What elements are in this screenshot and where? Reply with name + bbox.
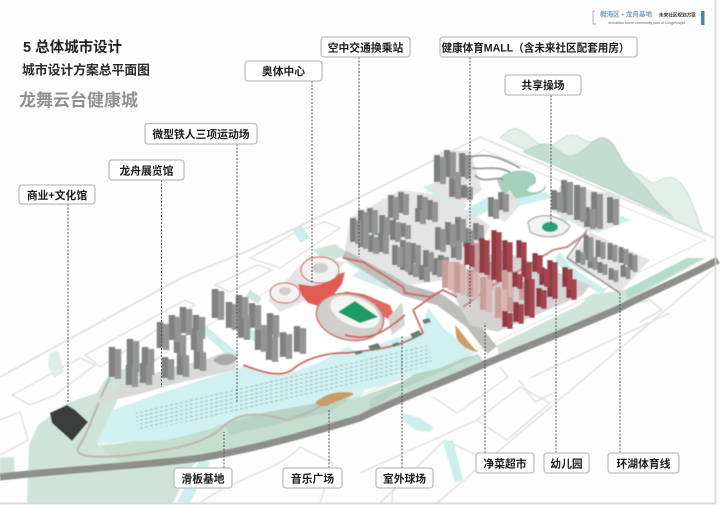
red running track — [243, 258, 457, 374]
label: 龙舟展览馆: 龙舟展览馆 — [120, 164, 174, 178]
expressway band — [0, 260, 718, 477]
ring road loop — [567, 230, 620, 293]
label: 商业+文化馆: 商业+文化馆 — [27, 188, 87, 202]
label: 环湖体育线 — [608, 453, 679, 473]
label: 商业+文化馆 — [19, 185, 95, 204]
red plaza — [298, 272, 345, 306]
commercial and culture hall — [50, 405, 88, 441]
west residential pads — [97, 353, 236, 403]
label: 滑板基地: 滑板基地 — [181, 472, 225, 486]
label: 音乐广场 — [283, 468, 342, 488]
project name: 龙舞云台健康城 — [19, 90, 138, 110]
label: 健康体育MALL: 健康体育MALL（含未来社区配套用房） — [442, 40, 630, 54]
grey towers west cluster — [112, 289, 303, 387]
site parcel and street lines — [0, 137, 715, 503]
header titles — [19, 38, 150, 110]
label: 幼儿园 — [544, 453, 589, 473]
large dome — [301, 257, 339, 283]
label: 幼儿园: 幼儿园 — [550, 456, 583, 470]
sub heading: 城市设计方案总平面图 — [22, 62, 150, 78]
label: 空中交通换乘站 — [321, 37, 410, 57]
red towers — [467, 230, 574, 329]
label: 共享操场 — [505, 75, 581, 95]
shared playground — [528, 216, 570, 237]
building pads — [268, 150, 650, 312]
sports courts — [354, 318, 431, 355]
label: 奥体中心: 奥体中心 — [262, 64, 305, 78]
label: 室外球场 — [376, 468, 433, 488]
label: 健康体育MALL — [440, 37, 637, 57]
label: 净菜超市 — [476, 453, 534, 473]
pale paved block behind red towers — [445, 250, 590, 332]
grey towers north-east cluster — [437, 150, 616, 229]
main site white base — [97, 150, 705, 445]
label: 微型铁人三项运动场 — [145, 124, 257, 144]
brown plaza: music square — [315, 392, 353, 406]
grey bridge road — [345, 252, 492, 350]
side hall — [388, 302, 405, 335]
top-right project logo: 概海区 • 龙舟基地 — [600, 10, 653, 18]
lake dot grid — [135, 345, 432, 432]
label: 空中交通换乘站: 空中交通换乘站 — [328, 40, 403, 54]
label: 净菜超市: 净菜超市 — [483, 456, 527, 470]
top-right project logo: 未来社区规划方案 — [659, 12, 696, 18]
sports centre — [270, 257, 398, 347]
main heading: 5 总体城市设计 — [23, 38, 123, 56]
label: 室外球场: 室外球场 — [383, 472, 426, 486]
brown beach — [455, 325, 478, 352]
label: 环湖体育线: 环湖体育线 — [617, 456, 671, 470]
green parkland — [0, 170, 706, 503]
central lake — [97, 307, 478, 443]
label: 滑板基地 — [174, 468, 232, 488]
mountains — [500, 129, 703, 233]
grey towers east cluster — [578, 235, 635, 282]
leader lines — [68, 57, 620, 468]
faded pink towers — [445, 243, 522, 320]
top-right project logo: Xinhaitian future community plan of Longzhoujidi — [608, 21, 686, 25]
label: 音乐广场: 音乐广场 — [291, 472, 334, 486]
north block tracery — [470, 155, 520, 180]
top-right project logo — [593, 10, 704, 25]
label: 龙舟展览馆 — [109, 160, 184, 180]
south shore path — [78, 378, 340, 457]
label: 共享操场: 共享操场 — [521, 78, 565, 92]
pale cyan water strips — [177, 184, 630, 503]
red stadium apron — [343, 291, 398, 324]
east greenway — [463, 233, 587, 307]
grey towers central cluster — [353, 192, 506, 282]
football pitch — [338, 301, 378, 323]
stadium bowl — [312, 287, 388, 347]
label: 微型铁人三项运动场: 微型铁人三项运动场 — [152, 127, 250, 141]
small dome — [270, 283, 300, 303]
label: 奥体中心 — [245, 61, 322, 81]
riverside sculpture — [213, 354, 238, 365]
